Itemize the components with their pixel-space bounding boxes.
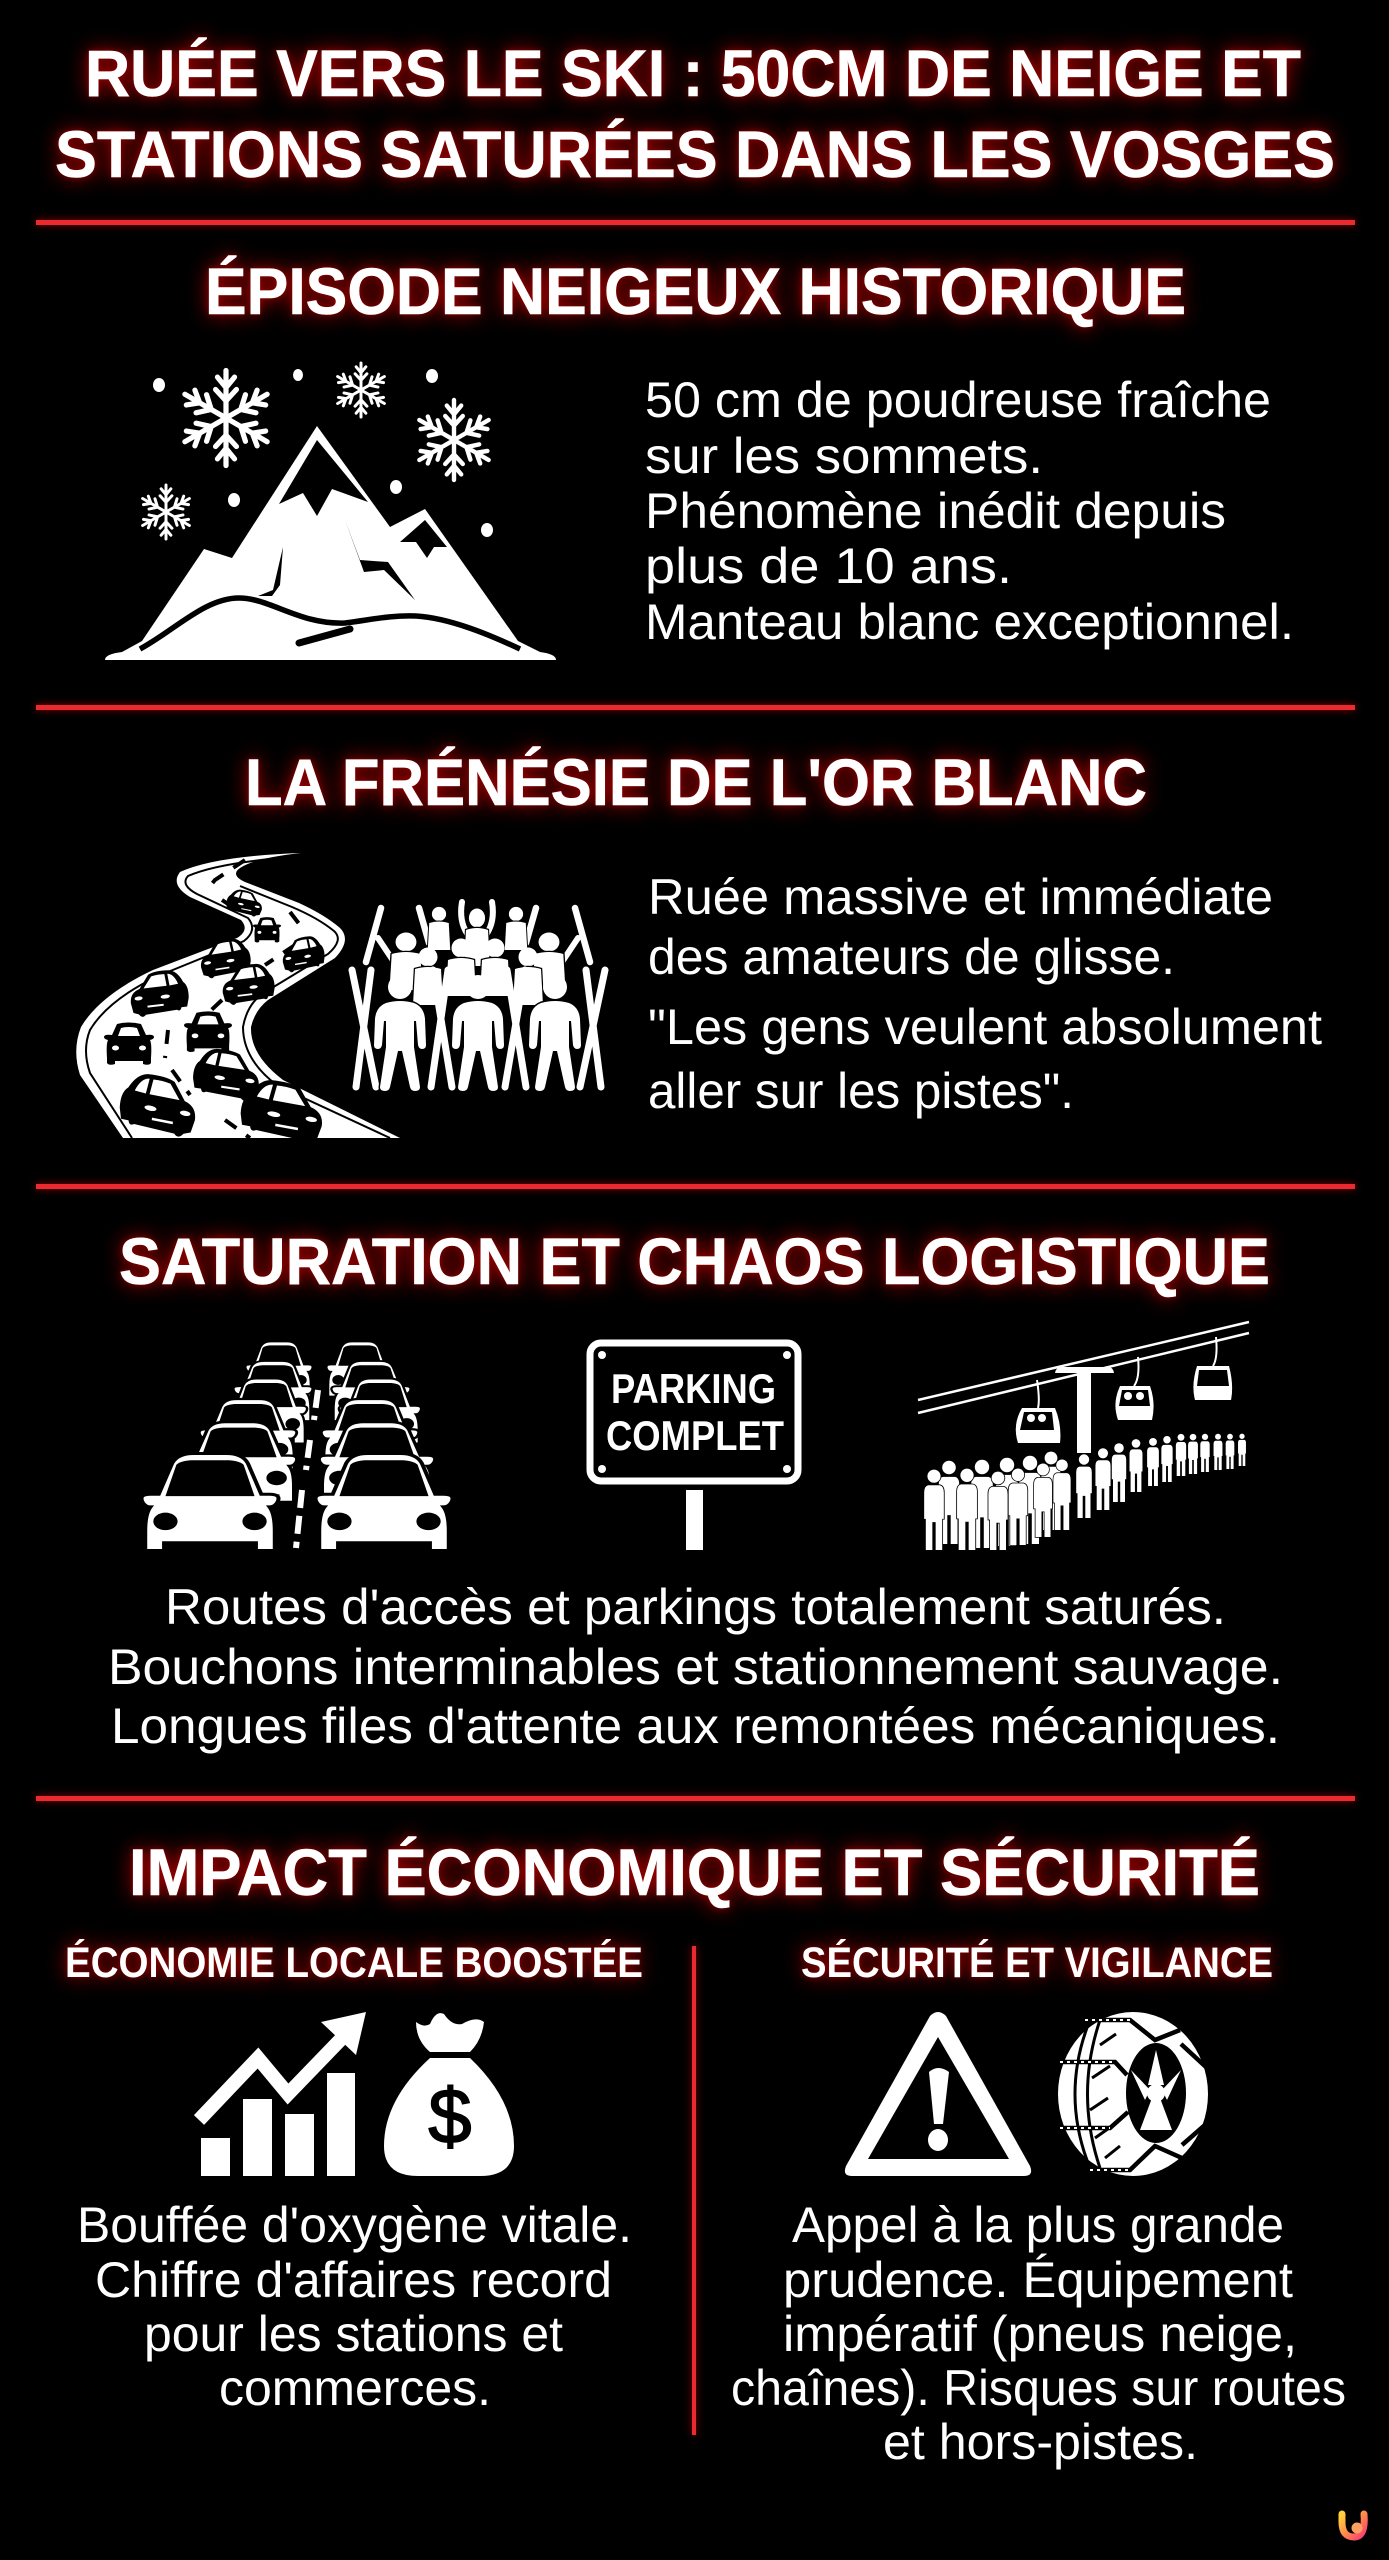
text block: poudreuse: sur les sommets. (645, 428, 1043, 484)
text block: routes saturées: Routes d'accès et parkings totalement saturés. (165, 1579, 1226, 1635)
text block: ruée massive: des amateurs de glisse. (648, 929, 1175, 985)
icon: parking complet sign (590, 1343, 798, 1550)
icon: crowd of skiers (352, 902, 605, 1091)
icon: parking complet sign: COMPLET (606, 1412, 784, 1459)
heading: saturation: SATURATION ET CHAOS LOGISTIQUE (119, 1224, 1270, 1298)
panel: frénésie de l'or blanc (76, 745, 1322, 1145)
title (55, 36, 1335, 191)
text block: bouffée d'oxygène: Chiffre d'affaires record (95, 2252, 612, 2308)
column: sécurité et vigilance (731, 1939, 1346, 2470)
text block: poudreuse: Phénomène inédit depuis (645, 483, 1226, 539)
text block: bouffée d'oxygène (77, 2197, 632, 2416)
text block: ruée massive (648, 869, 1322, 1119)
text block: routes saturées: Longues files d'attente aux remontées mécaniques. (111, 1698, 1280, 1754)
text block: ruée massive: Ruée massive et immédiate (648, 869, 1273, 925)
icon: logo (1342, 2514, 1364, 2537)
text block: prudence: et hors-pistes. (883, 2414, 1198, 2470)
panel: impact économique et sécurité (65, 1835, 1346, 2470)
title: STATIONS SATURÉES DANS LES VOSGES (55, 117, 1335, 191)
text block: prudence: chaînes). Risques sur routes (731, 2360, 1346, 2416)
icon: warning triangle (845, 2012, 1031, 2176)
text block: ruée massive: aller sur les pistes". (648, 1063, 1074, 1119)
panel: saturation et chaos logistique (108, 1224, 1283, 1754)
text block: bouffée d'oxygène: pour les stations et (144, 2306, 563, 2362)
heading: impact: IMPACT ÉCONOMIQUE ET SÉCURITÉ (129, 1835, 1260, 1909)
text block: prudence: impératif (pneus neige, (783, 2306, 1297, 2362)
text block: poudreuse (645, 372, 1294, 650)
subheading: économie: ÉCONOMIE LOCALE BOOSTÉE (65, 1939, 643, 1987)
icon: traffic on winding road (76, 853, 400, 1145)
heading: épisode neigeux: ÉPISODE NEIGEUX HISTORIQUE (205, 254, 1186, 328)
icon: gondola lift and queue (918, 1322, 1249, 1550)
text block: prudence (731, 2197, 1346, 2470)
text block: poudreuse: Manteau blanc exceptionnel. (645, 594, 1294, 650)
text block: bouffée d'oxygène: Bouffée d'oxygène vitale. (77, 2197, 632, 2253)
text block: prudence: Appel à la plus grande (792, 2197, 1284, 2253)
icon: tire with snow chains (1058, 2012, 1208, 2176)
text block: poudreuse: 50 cm de poudreuse fraîche (645, 372, 1271, 428)
icon: snowy mountain (105, 363, 556, 660)
icon: traffic jam (141, 1342, 453, 1550)
text block: prudence: prudence. Équipement (783, 2252, 1293, 2308)
icon: money bag (384, 2013, 514, 2176)
text block: routes saturées (108, 1579, 1283, 1754)
subheading: sécurité: SÉCURITÉ ET VIGILANCE (801, 1939, 1273, 1987)
icon: parking complet sign: PARKING (611, 1365, 776, 1412)
text block: routes saturées: Bouchons interminables et stationnement sauvage. (108, 1639, 1283, 1695)
text block: bouffée d'oxygène: commerces. (219, 2360, 491, 2416)
heading: frénésie: LA FRÉNÉSIE DE L'OR BLANC (245, 745, 1147, 819)
icon: growth chart (199, 2012, 366, 2176)
title: RUÉE VERS LE SKI : 50CM DE NEIGE ET (85, 36, 1301, 110)
panel: épisode neigeux historique (105, 254, 1294, 660)
text block: ruée massive: "Les gens veulent absolument (648, 999, 1322, 1055)
text block: poudreuse: plus de 10 ans. (645, 538, 1012, 594)
column: économie locale (65, 1939, 643, 2416)
icon: money bag: $ (428, 2072, 472, 2160)
